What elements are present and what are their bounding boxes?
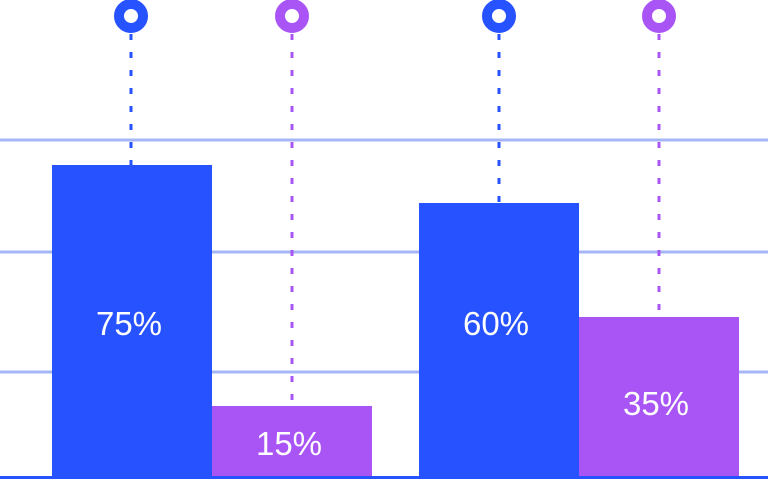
dashed leader lines [131, 34, 659, 406]
bar: 15%: 15% [256, 425, 322, 462]
bar: 60%: 60% [463, 305, 529, 342]
bar: 60% [419, 203, 579, 479]
bar: 15% [212, 406, 372, 479]
bar: 75% [52, 165, 212, 479]
bar: 35% [579, 317, 739, 479]
marker circles [119, 4, 671, 28]
bar: 35%: 35% [623, 385, 689, 422]
bar: 75%: 75% [96, 305, 162, 342]
